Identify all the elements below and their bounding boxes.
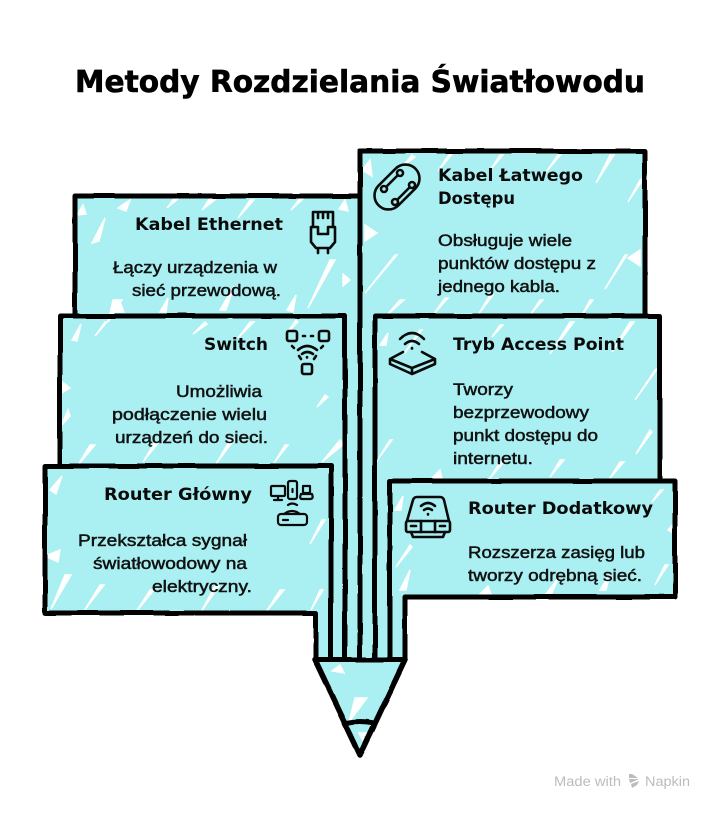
card: Router Dodatkowy <box>468 499 653 585</box>
title: Metody Rozdzielania Światłowodu <box>75 63 645 100</box>
card: Switch <box>112 335 268 447</box>
card: Tryb Access Point: internetu. <box>453 449 533 468</box>
napkin credit <box>554 774 690 789</box>
card: Tryb Access Point <box>453 335 624 468</box>
card: Switch: podłączenie wielu <box>112 405 267 424</box>
card: Kabel Ethernet: Kabel Ethernet <box>135 215 283 235</box>
card: Kabel Łatwego Dostępu: punktów dostępu z <box>438 254 596 273</box>
icon: napkin logo <box>629 774 639 788</box>
icon: cable board <box>369 159 425 215</box>
icon: switch network <box>287 331 329 374</box>
pencil fill with sketch hatching <box>45 150 675 755</box>
card: Kabel Ethernet: Łączy urządzenia w <box>113 258 278 277</box>
icon: ethernet plug <box>311 212 335 253</box>
card: Router Dodatkowy: tworzy odrębną sieć. <box>468 566 642 585</box>
card: Kabel Łatwego Dostępu: Obsługuje wiele <box>438 231 572 250</box>
card: Router Główny: Przekształca sygnał <box>78 531 247 550</box>
card: Kabel Ethernet <box>113 215 283 300</box>
card: Router Główny: Router Główny <box>104 485 252 505</box>
card: Tryb Access Point: punkt dostępu do <box>453 426 598 445</box>
card: Router Główny: elektryczny. <box>152 577 252 596</box>
card: Tryb Access Point: Tryb Access Point <box>453 335 624 355</box>
napkin credit: Made with <box>554 774 621 789</box>
card: Kabel Łatwego Dostępu: jednego kabla. <box>437 277 560 296</box>
card: Tryb Access Point: bezprzewodowy <box>453 403 590 422</box>
card: Kabel Ethernet: sieć przewodową. <box>132 281 281 300</box>
card: Router Główny <box>78 485 252 596</box>
card: Router Dodatkowy: Rozszerza zasięg lub <box>468 543 645 562</box>
card: Tryb Access Point: Tworzy <box>453 380 514 399</box>
icon: extra router <box>406 497 450 537</box>
card: Router Dodatkowy: Router Dodatkowy <box>468 499 653 519</box>
card: Kabel Łatwego Dostępu: Dostępu <box>438 189 515 209</box>
card: Switch: Switch <box>204 335 268 355</box>
card: Switch: Umożliwia <box>176 382 263 401</box>
icon: router with devices <box>271 481 313 525</box>
panel outlines and pencil barrel <box>45 151 675 755</box>
card: Kabel Łatwego Dostępu: Kabel Łatwego <box>438 166 583 186</box>
napkin credit: Napkin <box>645 774 690 789</box>
card: Router Główny: światłowodowy na <box>93 554 248 573</box>
icon: access point <box>390 333 435 374</box>
card: Switch: urządzeń do sieci. <box>115 428 268 447</box>
card: Kabel Łatwego Dostępu <box>437 166 596 296</box>
